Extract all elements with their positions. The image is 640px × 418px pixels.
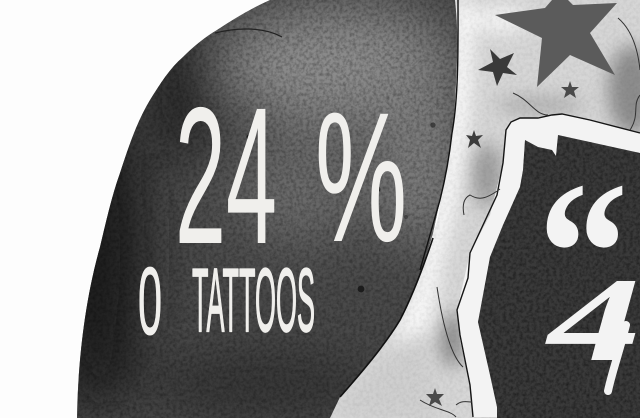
label: 0 tattoos [138, 248, 315, 355]
white frame [457, 114, 640, 417]
large percentage [175, 68, 407, 285]
panel: right tattooed skin [320, 0, 640, 418]
zero: 0 [138, 248, 162, 355]
skin cracks [420, 18, 640, 417]
number: 24: 24 [175, 68, 277, 285]
small tattoo star [466, 130, 483, 148]
small tattoo star [426, 388, 444, 406]
large tattoo star [495, 0, 617, 87]
small tattoo star [478, 49, 517, 86]
quote number: 4 with brush tail: 4 [544, 253, 640, 386]
moles [246, 122, 436, 292]
tattoos: TATTOOS [192, 251, 315, 351]
arm edge line [420, 0, 458, 270]
panel: dark shoulder [77, 0, 458, 418]
skin shading [392, 0, 640, 374]
percent sign: % [315, 73, 407, 280]
shoulder crease [215, 29, 282, 37]
shoulder lighting [45, 5, 465, 415]
small tattoo star [561, 81, 579, 98]
frame outline [457, 114, 640, 417]
opening quotation mark: “ [538, 139, 628, 367]
panel: quote board [470, 120, 640, 418]
